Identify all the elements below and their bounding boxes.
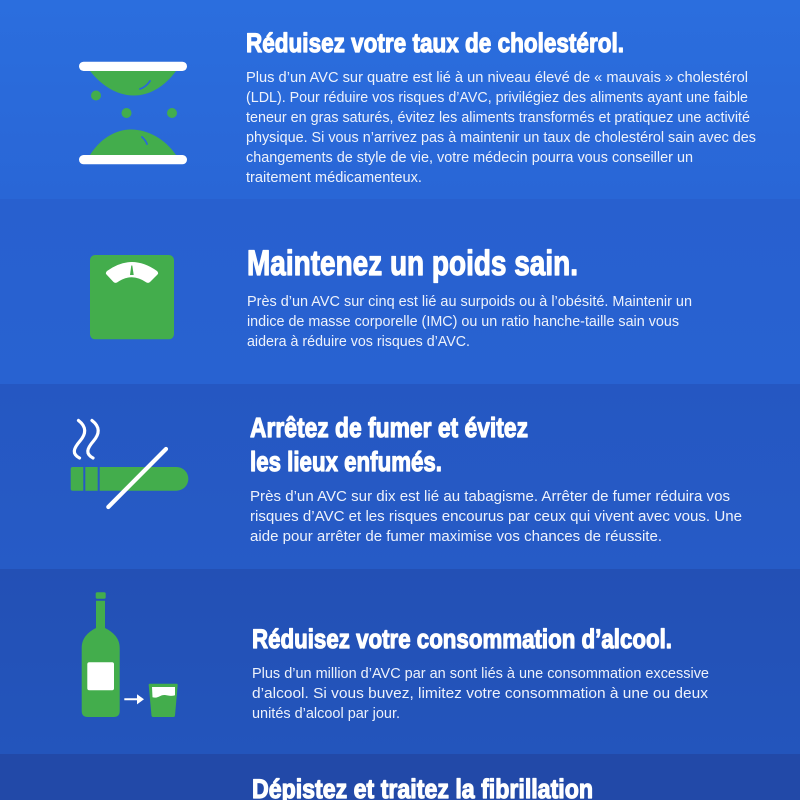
heading: healthy weight: Maintenez un poids sain.: [247, 244, 578, 283]
icon: cholesterol artery: [79, 62, 187, 164]
text: healthy weight body: [247, 294, 692, 350]
text: alcohol body: Plus d’un million d’AVC par an sont liés à une consommation excessive: [252, 666, 709, 682]
text: alcohol body: d’alcool. Si vous buvez, limitez votre consommation à une ou deux: [252, 686, 709, 702]
text: smoking body: [250, 489, 742, 545]
icon: wine bottle and glass: [82, 592, 178, 717]
text: smoking body: aide pour arrêter de fumer maximise vos chances de réussite.: [250, 529, 662, 545]
text: cholesterol body: (LDL). Pour réduire vos risques d’AVC, privilégiez des aliments ayant une faible: [246, 90, 748, 106]
panel: alcohol: [0, 569, 800, 754]
panel: cholesterol: [0, 0, 800, 199]
text: alcohol body: [252, 666, 709, 722]
text: cholesterol body: changements de style de vie, votre médecin pourra vous conseiller un: [246, 150, 693, 166]
text: healthy weight body: indice de masse corporelle (IMC) ou un ratio hanche-taille sain vous: [247, 314, 679, 330]
panel: smoking: [0, 384, 800, 569]
text: healthy weight body: aidera à réduire vos risques d’AVC.: [247, 334, 470, 350]
text: cholesterol body: physique. Si vous n’arrivez pas à maintenir un taux de cholestérol sain avec des: [246, 130, 756, 146]
text: cholesterol body: [246, 70, 756, 186]
icon: bathroom scale: [90, 255, 174, 339]
text: smoking body: risques d’AVC et les risques encourus par ceux qui vivent avec vous. Une: [250, 509, 742, 525]
heading: cholesterol: Réduisez votre taux de cholestérol.: [246, 28, 624, 58]
heading: smoking: les lieux enfumés.: [250, 446, 442, 477]
heading: smoking: Arrêtez de fumer et évitez: [250, 412, 528, 443]
text: smoking body: Près d’un AVC sur dix est lié au tabagisme. Arrêter de fumer réduira vos: [250, 489, 730, 505]
text: alcohol body: unités d’alcool par jour.: [252, 706, 400, 722]
panel: atrial fibrillation: [0, 754, 800, 800]
text: healthy weight body: Près d’un AVC sur cinq est lié au surpoids ou à l’obésité. Maintenir un: [247, 294, 692, 310]
icon: crossed-out cigarette: [71, 420, 188, 507]
text: cholesterol body: traitement médicamenteux.: [246, 170, 422, 186]
panel: healthy weight: [0, 199, 800, 384]
heading: alcohol: Réduisez votre consommation d’alcool.: [252, 624, 672, 654]
text: cholesterol body: Plus d’un AVC sur quatre est lié à un niveau élevé de « mauvais » cholestérol: [246, 70, 748, 86]
heading: smoking: [250, 412, 528, 477]
text: cholesterol body: teneur en gras saturés, évitez les aliments transformés et pratiquez une activité: [246, 110, 750, 126]
